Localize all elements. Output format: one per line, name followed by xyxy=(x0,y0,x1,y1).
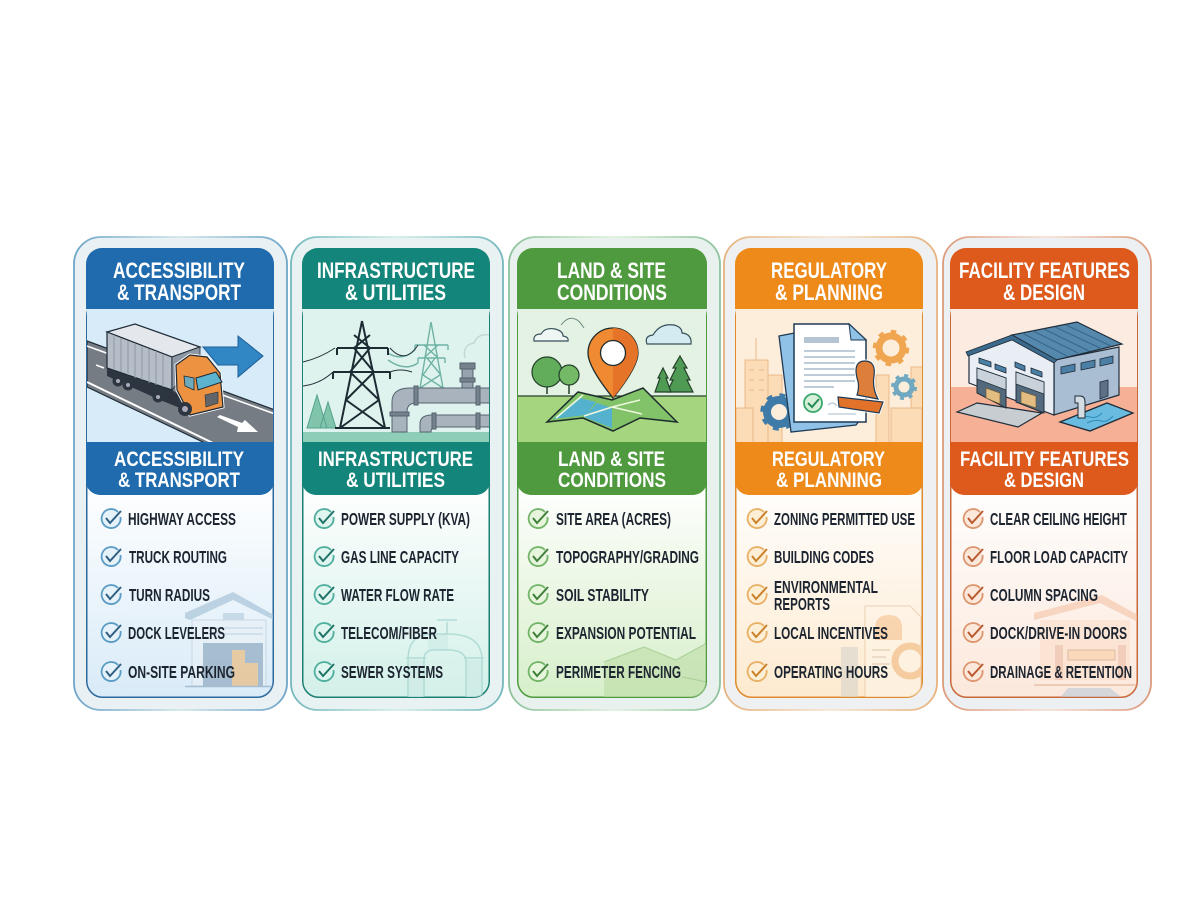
panel: infrastructure & utilities xyxy=(291,237,503,710)
list body xyxy=(736,300,922,697)
lower header band: REGULATORY xyxy=(772,448,885,471)
lower header band xyxy=(517,442,707,495)
clouds xyxy=(534,329,568,341)
pipes xyxy=(390,363,490,432)
ramp xyxy=(957,403,1042,427)
illustration: truck on highway xyxy=(87,309,275,443)
checklist: HIGHWAY ACCESS xyxy=(128,509,236,529)
list body xyxy=(87,300,273,697)
lower header band: FACILITY FEATURES xyxy=(960,448,1129,471)
checklist: FLOOR LOAD CAPACITY xyxy=(990,547,1128,567)
check seal xyxy=(804,394,822,412)
lower header band: & DESIGN xyxy=(1004,469,1084,492)
cab xyxy=(176,355,223,415)
orange gear xyxy=(874,332,908,364)
checklist: DOCK/DRIVE-IN DOORS xyxy=(990,623,1127,643)
checklist xyxy=(102,509,236,682)
front document xyxy=(794,324,866,422)
lower header band: & PLANNING xyxy=(776,469,882,492)
top header: INFRASTRUCTURE xyxy=(317,258,475,283)
ghost tower xyxy=(388,322,448,388)
checklist: ENVIRONMENTAL xyxy=(774,577,878,597)
watermark: documents and gear xyxy=(841,606,925,699)
checklist: REPORTS xyxy=(774,594,830,614)
checklist: WATER FLOW RATE xyxy=(341,585,454,605)
lower header band xyxy=(302,442,490,495)
checklist xyxy=(315,509,470,682)
top header: & UTILITIES xyxy=(345,280,446,305)
top header: REGULATORY xyxy=(771,258,887,283)
city skyline xyxy=(736,338,923,444)
boxes xyxy=(986,388,1036,408)
back blue sheet xyxy=(779,332,860,432)
panel frame xyxy=(943,237,1151,710)
panel: land & site conditions xyxy=(509,237,720,710)
left trees xyxy=(546,386,570,394)
power lines xyxy=(303,345,418,386)
checklist: LOCAL INCENTIVES xyxy=(774,623,888,643)
top header: & PLANNING xyxy=(775,280,883,305)
checklist xyxy=(529,509,699,682)
lower header band: INFRASTRUCTURE xyxy=(318,448,473,471)
list body xyxy=(518,300,706,697)
checklist: OPERATING HOURS xyxy=(774,662,888,682)
top header: FACILITY FEATURES xyxy=(959,258,1130,283)
right wall xyxy=(1054,347,1119,415)
blue direction arrow xyxy=(203,336,263,377)
top header: ACCESSIBILITY xyxy=(113,258,245,283)
lower header band xyxy=(86,442,274,495)
road arrow xyxy=(217,415,258,432)
watermark: facility xyxy=(1034,595,1138,700)
checklist: SITE AREA (ACRES) xyxy=(556,509,671,529)
checklist: PERIMETER FENCING xyxy=(556,662,681,682)
illustration: warehouse with retention pond xyxy=(951,309,1137,443)
clouds xyxy=(464,335,490,358)
checklist: BUILDING CODES xyxy=(774,547,874,567)
checklist xyxy=(964,509,1132,682)
dock doors xyxy=(977,368,1006,408)
panel: accessibility & transport xyxy=(74,237,287,710)
main tower xyxy=(333,321,390,428)
illustration: map pin in landscape xyxy=(518,309,706,443)
illustration: power towers and pipes xyxy=(303,309,490,443)
lower header band: & TRANSPORT xyxy=(118,469,240,492)
checklist: TRUCK ROUTING xyxy=(129,547,227,567)
folded map xyxy=(547,388,677,431)
lower header band: ACCESSIBILITY xyxy=(114,448,244,471)
checklist: EXPANSION POTENTIAL xyxy=(556,623,696,643)
lower header band: CONDITIONS xyxy=(558,469,666,492)
watermark: water pipe xyxy=(406,620,484,700)
checklist: SOIL STABILITY xyxy=(556,585,649,605)
pine trees xyxy=(667,356,693,392)
panel frame xyxy=(74,237,287,710)
panel frame xyxy=(509,237,720,710)
list body xyxy=(303,300,489,697)
list body xyxy=(951,300,1137,697)
checklist: TELECOM/FIBER xyxy=(341,623,437,643)
checklist: TOPOGRAPHY/GRADING xyxy=(556,547,699,567)
chassis xyxy=(107,368,182,408)
retention pond xyxy=(1060,403,1133,431)
dark blue gear xyxy=(762,395,796,429)
drain pipe xyxy=(1075,396,1085,418)
side door xyxy=(1100,380,1108,399)
checklist: GAS LINE CAPACITY xyxy=(341,547,459,567)
lower header band: & UTILITIES xyxy=(346,469,445,492)
top header xyxy=(517,248,707,309)
trees xyxy=(307,395,336,428)
checklist xyxy=(748,509,915,682)
panel: regulatory & planning xyxy=(724,237,937,710)
top header xyxy=(86,248,274,309)
stamp xyxy=(856,361,878,399)
lower header band: LAND & SITE xyxy=(558,448,665,471)
top header: & DESIGN xyxy=(1003,280,1085,305)
checklist: COLUMN SPACING xyxy=(990,585,1098,605)
lower header band xyxy=(735,442,923,495)
checklist: CLEAR CEILING HEIGHT xyxy=(990,509,1127,529)
checklist: POWER SUPPLY (KVA) xyxy=(341,509,470,529)
top header xyxy=(735,248,923,309)
checklist: SEWER SYSTEMS xyxy=(341,662,443,682)
container xyxy=(107,324,200,357)
light blue gear xyxy=(892,376,916,398)
panel frame xyxy=(724,237,937,710)
watermark: warehouse xyxy=(185,592,274,687)
roof xyxy=(1012,322,1122,360)
checklist: TURN RADIUS xyxy=(129,585,210,605)
panel frame xyxy=(291,237,503,710)
top header xyxy=(302,248,490,309)
checklist: ZONING PERMITTED USE xyxy=(774,509,915,529)
top header: CONDITIONS xyxy=(557,280,667,305)
front wall xyxy=(969,338,1054,415)
checklist: ON-SITE PARKING xyxy=(128,662,235,682)
top header: & TRANSPORT xyxy=(117,280,241,305)
windows xyxy=(979,356,1113,377)
lower header band xyxy=(950,442,1138,495)
panel: facility features & design xyxy=(943,237,1151,710)
top header xyxy=(950,248,1138,309)
illustration: documents, stamp and gears xyxy=(736,309,923,444)
watermark: hills xyxy=(604,643,707,700)
checklist: DOCK LEVELERS xyxy=(128,623,225,643)
top header: LAND & SITE xyxy=(557,258,666,283)
map pin xyxy=(588,328,638,398)
